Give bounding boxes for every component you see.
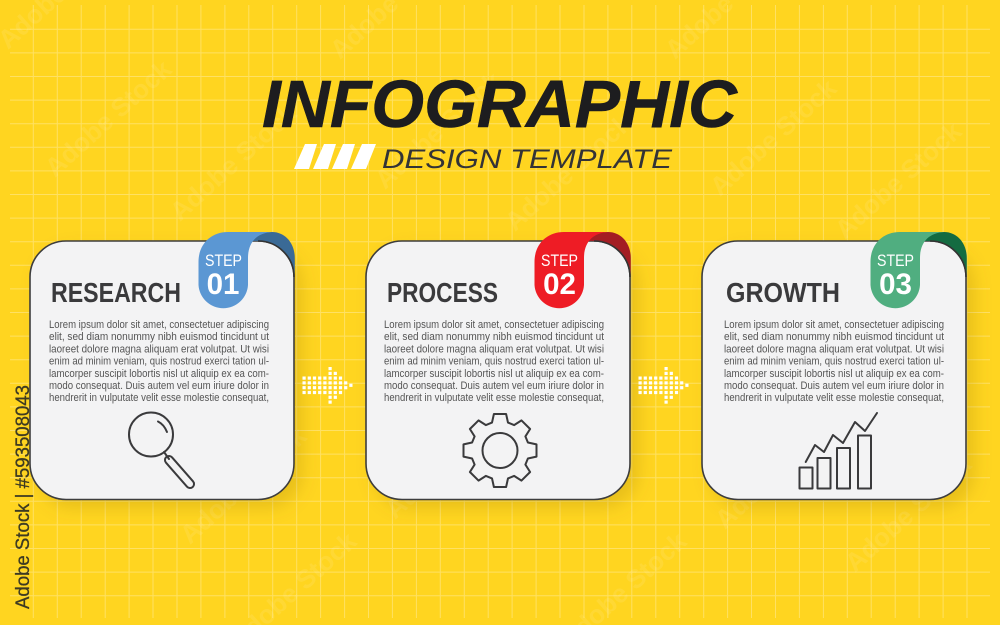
step number: 01 — [207, 268, 239, 301]
body text: hendrerit in vulputate velit esse molestie consequat, — [49, 392, 269, 404]
watermarks: Adobe Stock — [829, 115, 968, 244]
body text: lamcorper suscipit lobortis nisl ut aliquip ex ea com- — [49, 368, 269, 380]
step label: STEP — [541, 252, 578, 270]
body text: enim ad minim veniam, quis nostrud exerci tation ul- — [384, 356, 604, 368]
body text: enim ad minim veniam, quis nostrud exerci tation ul- — [49, 356, 269, 368]
step label: STEP — [205, 252, 242, 270]
step tab fold — [586, 232, 631, 277]
body text: modo consequat. Duis autem vel eum iriure dolor in — [384, 380, 604, 392]
step tab — [198, 232, 272, 308]
body text: laoreet dolore magna aliquam erat volutpat. Ut wisi — [724, 343, 944, 355]
watermarks: Adobe Stock — [369, 65, 508, 194]
watermarks: Adobe Stock — [704, 72, 843, 201]
body text: enim ad minim veniam, quis nostrud exerci tation ul- — [724, 356, 944, 368]
card background — [702, 241, 966, 500]
card background — [366, 241, 630, 500]
body text: Lorem ipsum dolor sit amet, consectetuer adipiscing — [49, 319, 269, 331]
body text: elit, sed diam nonummy nibh euismod tincidunt ut — [724, 331, 944, 343]
watermarks: Adobe Stock — [164, 97, 303, 226]
arrow: research to process — [302, 367, 352, 404]
body text — [724, 319, 944, 404]
body text: modo consequat. Duis autem vel eum iriure dolor in — [724, 380, 944, 392]
step tab — [870, 232, 944, 308]
watermarks: Adobe Stock — [839, 448, 978, 577]
watermarks: Adobe Stock — [709, 405, 848, 534]
body text: hendrerit in vulputate velit esse molestie consequat, — [724, 392, 944, 404]
step tab fold — [922, 232, 967, 277]
title: INFOGRAPHIC — [262, 67, 739, 142]
body text: elit, sed diam nonummy nibh euismod tincidunt ut — [49, 331, 269, 343]
heading: RESEARCH — [51, 277, 181, 308]
watermarks: Adobe Stock — [499, 107, 638, 236]
icon: growth chart — [800, 413, 877, 488]
body text — [384, 319, 604, 404]
body text: lamcorper suscipit lobortis nisl ut aliquip ex ea com- — [384, 368, 604, 380]
step tab fold — [250, 232, 295, 277]
watermarks: Adobe Stock — [39, 53, 178, 182]
step label: STEP — [877, 252, 914, 270]
icon: title slashes — [294, 144, 376, 169]
body text: Lorem ipsum dolor sit amet, consectetuer adipiscing — [724, 319, 944, 331]
body text: laoreet dolore magna aliquam erat volutpat. Ut wisi — [384, 343, 604, 355]
panel: process — [366, 232, 631, 500]
body text: modo consequat. Duis autem vel eum iriure dolor in — [49, 380, 269, 392]
step tab — [534, 232, 608, 308]
body text: hendrerit in vulputate velit esse molestie consequat, — [384, 392, 604, 404]
body text: elit, sed diam nonummy nibh euismod tincidunt ut — [384, 331, 604, 343]
panel: research — [30, 232, 295, 500]
heading: GROWTH — [726, 277, 840, 308]
icon: gear — [464, 414, 536, 487]
icon: magnifying glass — [129, 412, 194, 488]
subtitle: DESIGN TEMPLATE — [382, 144, 673, 174]
arrow: process to growth — [638, 367, 688, 404]
card background — [30, 241, 294, 500]
heading: PROCESS — [387, 277, 498, 308]
watermarks: Adobe Stock — [174, 420, 313, 549]
body text: laoreet dolore magna aliquam erat volutpat. Ut wisi — [49, 343, 269, 355]
watermarks: Adobe Stock — [379, 395, 518, 524]
panel: growth — [702, 232, 967, 500]
body text — [49, 319, 269, 404]
step number: 02 — [543, 268, 576, 301]
step number: 03 — [879, 268, 912, 301]
stock credit: Adobe Stock | #593508043 — [13, 385, 34, 609]
body text: Lorem ipsum dolor sit amet, consectetuer adipiscing — [384, 319, 604, 331]
body text: lamcorper suscipit lobortis nisl ut aliquip ex ea com- — [724, 368, 944, 380]
